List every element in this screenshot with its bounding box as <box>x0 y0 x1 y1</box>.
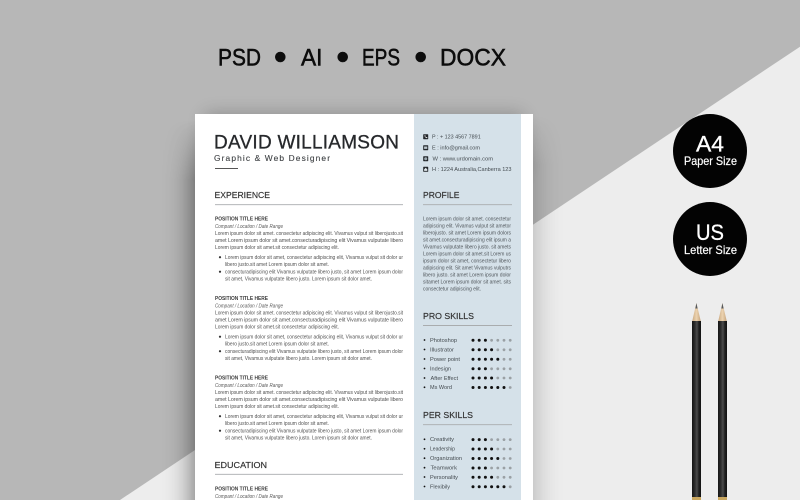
job entry 2: Compant / Location / Date Range <box>215 303 283 309</box>
pro skills list: Indesign <box>430 366 451 372</box>
personal skills list: Personality <box>430 475 458 481</box>
heading: file formats: EPS <box>362 45 400 72</box>
job entry 1: POSITION TITLE HERE <box>215 216 268 222</box>
name: DAVID WILLIAMSON <box>214 132 399 153</box>
job entry 1: amet Lorem ipsum dolor sit amet.consecturadipiscing elit Vivamus vulputate libero <box>215 238 403 244</box>
profile text: Lorem ipsum dolor sit amet.sit Lorem us <box>423 252 511 258</box>
rating dots: pro skills <box>472 339 512 389</box>
job entry 2: libero justo.sit amet Lorem ipsum dolor sit amet. <box>225 341 329 347</box>
education entry: Compant / Location / Date Range <box>215 494 283 500</box>
job entry 2: amet Lorem ipsum dolor sit amet.consecturadipiscing elit Vivamus vulputate libero <box>215 317 403 323</box>
personal skills list: Creativity <box>430 437 454 443</box>
job entry 1: consecturadipiscing elit Vivamus vulputate libero justo, sit amet Lorem ipsum dolor <box>225 269 403 275</box>
icon: email <box>423 145 428 150</box>
badge: A4 paper size: Paper Size <box>684 154 737 168</box>
job entry 2: Lorem ipsum dolor sit amet. consectetur adipiscing elit. Vivamus vulput sit liberojusto.sit <box>215 310 403 316</box>
job entry 1: Lorem ipsum dolor sit amet. consectetur adipiscing elit. Vivamus vulput sit liberojusto.sit <box>215 231 403 237</box>
profile text: libero justo. sit amet Lorem ipsum dolor <box>423 272 511 278</box>
personal skills list: Organization <box>430 456 462 462</box>
job entry 1: Lorem ipsum dolor sit amet, consectetur adipiscing elit, Vivamus vulput sit dolor ur <box>225 255 403 261</box>
profile text: ipsum dolor sit amet, consectetur libero <box>423 258 511 264</box>
contact details: E : info@gmail.com <box>432 146 480 152</box>
personal skills list: Teamwork <box>430 466 457 472</box>
heading: file formats: PSD <box>218 45 261 72</box>
icon: phone <box>423 134 428 139</box>
rating dots: personal skills <box>472 438 512 488</box>
education entry <box>215 486 283 500</box>
job entry 3: sit amet, Vivamus vulputate libero justo. Lorem ipsum sit dolor amet. <box>225 435 372 441</box>
job entry 2 <box>215 296 403 362</box>
job entry 2: POSITION TITLE HERE <box>215 296 268 302</box>
heading: profile: PROFILE <box>423 190 460 200</box>
pro skills list <box>424 338 512 391</box>
job entry 3: amet Lorem ipsum dolor sit amet.consecturadipiscing elit Vivamus vulputate libero <box>215 397 403 403</box>
icon: pencil left <box>692 303 701 500</box>
profile text: Lorem ipsum dolor sit amet. consectetur <box>423 216 511 222</box>
job entry 1 <box>215 216 403 282</box>
profile text: adipiscing elit. Sit amet Vivamus vulputrs <box>423 266 511 272</box>
contact details: P : + 123 4567 7891 <box>432 135 481 141</box>
heading: file formats <box>218 45 506 72</box>
heading: per skills <box>423 410 512 425</box>
pro skills list: Photoshop <box>430 338 457 344</box>
badge: US letter size <box>673 202 747 276</box>
heading: profile <box>423 190 512 205</box>
pro skills list: Power point <box>430 357 460 363</box>
job entry 3: consecturadipiscing elit Vivamus vulputate libero justo, sit amet Lorem ipsum dolor <box>225 428 403 434</box>
profile text: Vivamus vulputate libero justo. sit amets <box>423 244 511 250</box>
job entry 1: sit amet, Vivamus vulputate libero justo. Lorem ipsum sit dolor amet. <box>225 276 372 282</box>
job entry 3: Lorem ipsum dolor sit amet.sit consectetur adipiscing elit. <box>215 404 339 410</box>
job entry 2: Lorem ipsum dolor sit amet, consectetur adipiscing elit, Vivamus vulput sit dolor ur <box>225 334 403 340</box>
heading: file formats: AI <box>301 45 322 72</box>
job entry 3: Lorem ipsum dolor sit amet. consectetur adipiscing elit. Vivamus vulput sit liberojusto.sit <box>215 390 403 396</box>
job entry 3: Lorem ipsum dolor sit amet, consectetur adipiscing elit, Vivamus vulput sit dolor ur <box>225 414 403 420</box>
job entry 1: Compant / Location / Date Range <box>215 224 283 230</box>
icon: website <box>423 156 428 161</box>
job entry 2: sit amet, Vivamus vulputate libero justo. Lorem ipsum sit dolor amet. <box>225 356 372 362</box>
pro skills list: Ms Word <box>430 385 452 391</box>
job entry 2: consecturadipiscing elit Vivamus vulputate libero justo, sit amet Lorem ipsum dolor <box>225 349 403 355</box>
background: grey and light diagonal panels <box>120 46 800 500</box>
badge: A4 paper size: A4 <box>696 132 724 157</box>
personal skills list: Leadership <box>430 447 455 453</box>
education entry: POSITION TITLE HERE <box>215 486 268 492</box>
contact details <box>423 134 512 173</box>
profile text <box>423 216 511 292</box>
job entry 3: libero justo.sit amet Lorem ipsum dolor sit amet. <box>225 421 329 427</box>
job entry 1: libero justo.sit amet Lorem ipsum dolor sit amet. <box>225 262 329 268</box>
heading: education: EDUCATION <box>214 460 267 470</box>
job entry 2: Lorem ipsum dolor sit amet.sit consectetur adipiscing elit. <box>215 324 339 330</box>
icon: pencil right <box>718 303 727 500</box>
profile text: sitamet Lorem ipsum dolor sit amet. sits <box>423 280 511 286</box>
badge: A4 paper size <box>673 114 747 188</box>
heading: file formats: DOCX <box>440 45 506 72</box>
profile text: adipiscing elit. Vivamus vulput sit ametor <box>423 224 511 230</box>
badge: US letter size: Letter Size <box>684 243 737 257</box>
personal skills list <box>424 437 512 490</box>
contact details: W : www.urdomain.com <box>432 157 493 163</box>
pro skills list: Illustrator <box>430 347 454 353</box>
profile text: liberojusto. sit amet Lorem ipsum dolors <box>423 230 511 236</box>
heading: per skills: PER SKILLS <box>423 410 473 420</box>
panel: blue sidebar <box>414 114 521 500</box>
job title: Graphic & Web Designer <box>214 153 330 163</box>
name underline <box>215 168 238 169</box>
contact details: H : 1224 Australia,Canberra 123 <box>432 167 512 173</box>
icon: home address <box>423 167 428 172</box>
job entry 1: Lorem ipsum dolor sit amet.sit consectetur adipiscing elit. <box>215 245 339 251</box>
profile text: consectetur adipiscing elit. <box>423 286 481 292</box>
panel: resume page <box>195 114 533 500</box>
profile text: sit amet.consecturadipiscing elit ipsum a <box>423 238 511 244</box>
pro skills list: After Effect <box>430 376 458 382</box>
badge: US letter size: US <box>696 220 724 245</box>
job entry 3 <box>215 376 403 441</box>
personal skills list: Flexibily <box>430 484 450 490</box>
job entry 3: POSITION TITLE HERE <box>215 376 268 382</box>
heading: experience: EXPERIENCE <box>214 190 270 200</box>
heading: pro skills <box>423 311 512 326</box>
heading: pro skills: PRO SKILLS <box>423 311 474 321</box>
job entry 3: Compant / Location / Date Range <box>215 383 283 389</box>
